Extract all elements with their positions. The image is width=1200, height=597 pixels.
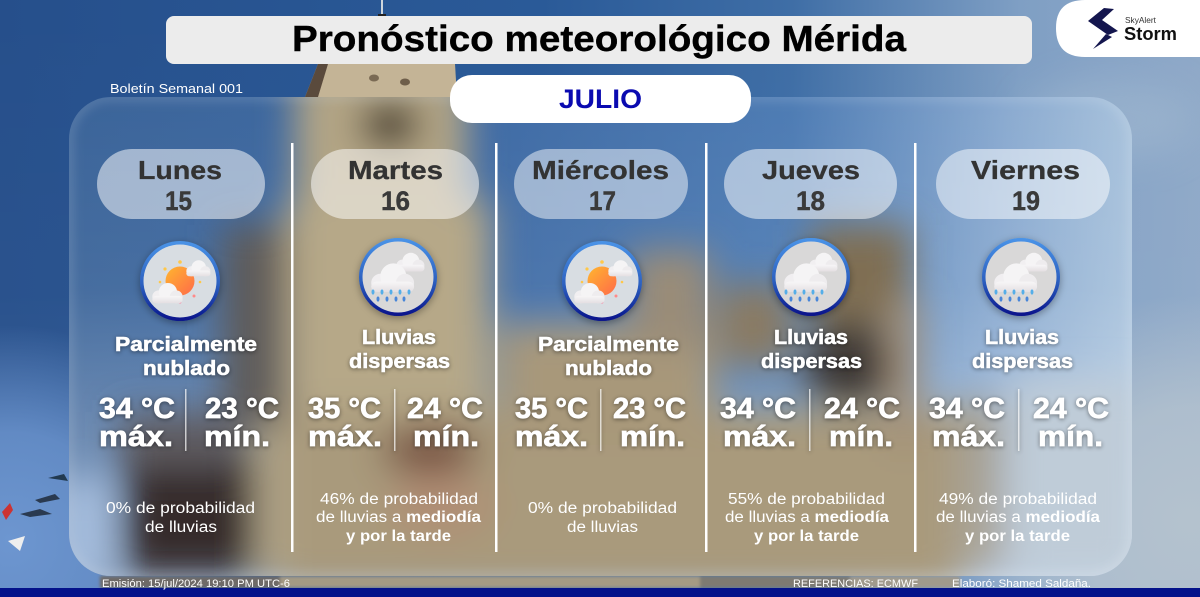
bulletin label: Boletín Semanal 001 — [110, 82, 243, 96]
temperatures: 35 °C — [308, 393, 381, 425]
rain probability: de lluvias — [567, 519, 638, 536]
column: Miércoles 17 — [514, 149, 688, 536]
day pill: Martes — [311, 149, 479, 219]
rain probability: de lluvias a mediodía — [936, 509, 1100, 526]
month pill — [450, 75, 751, 123]
condition text — [761, 327, 862, 373]
temperatures: 34 °C — [720, 393, 796, 425]
temperatures: máx. — [99, 421, 173, 453]
temperatures: 24 °C — [407, 393, 483, 425]
icon: partly cloudy — [140, 241, 220, 321]
footer: emission date: Emisión: 15/jul/2024 19:10 PM UTC-6 — [102, 578, 290, 590]
temperatures: mín. — [620, 421, 685, 453]
temperatures: 24 °C — [824, 393, 900, 425]
rain probability — [106, 500, 255, 536]
day pill: Lunes — [97, 149, 265, 219]
rain probability: de lluvias a mediodía — [316, 509, 481, 526]
condition text — [972, 327, 1073, 373]
icon: scattered rain — [772, 238, 850, 316]
temperatures: 23 °C — [613, 393, 686, 425]
temperatures — [99, 389, 279, 453]
temperatures — [308, 389, 483, 453]
logo: SkyAlert Storm — [1056, 0, 1200, 57]
temperatures — [515, 389, 686, 453]
condition text: Lluvias — [362, 327, 436, 349]
column: Martes 16 — [308, 149, 483, 545]
temperatures — [929, 389, 1109, 453]
footer: references: REFERENCIAS: ECMWF — [793, 578, 918, 590]
temperatures: mín. — [413, 421, 479, 453]
icon: scattered rain — [359, 238, 437, 316]
condition text: Parcialmente — [538, 334, 679, 356]
panel: frosted glass forecast panel — [60, 70, 1140, 590]
day pill: Viernes: Viernes — [971, 155, 1080, 185]
temperatures: 34 °C — [99, 393, 175, 425]
rain probability — [725, 491, 889, 545]
rain probability — [936, 491, 1100, 545]
condition text: Lluvias — [985, 327, 1059, 349]
rain probability — [528, 500, 677, 536]
temperatures: mín. — [1038, 421, 1103, 453]
day pill: Viernes — [936, 149, 1110, 219]
condition text: Parcialmente — [115, 334, 257, 356]
title bar — [166, 16, 1032, 64]
condition text: nublado — [565, 358, 652, 380]
temperatures: 35 °C — [515, 393, 588, 425]
condition text: nublado — [143, 358, 230, 380]
condition text: dispersas — [349, 351, 450, 373]
day pill: Jueves: Jueves — [762, 155, 860, 185]
temperatures — [720, 389, 900, 453]
rain probability — [316, 491, 481, 545]
rain probability: 55% de probabilidad — [728, 491, 885, 508]
bottom bar — [0, 588, 1200, 597]
day pill: Miércoles — [514, 149, 688, 219]
footer: author: Elaboró: Shamed Saldaña. — [952, 578, 1091, 590]
column dividers — [291, 143, 916, 552]
rain probability: 49% de probabilidad — [939, 491, 1097, 508]
day pill: Miércoles: 17 — [589, 186, 616, 216]
condition text — [538, 334, 679, 380]
day pill: Lunes: 15 — [165, 186, 192, 216]
condition text: dispersas — [761, 351, 862, 373]
temperatures: máx. — [723, 421, 796, 453]
column: Viernes 19 — [929, 149, 1110, 545]
temperatures: máx. — [515, 421, 588, 453]
day pill: Jueves: 18 — [796, 186, 825, 216]
rain probability: y por la tarde — [346, 528, 451, 545]
temperatures: máx. — [932, 421, 1005, 453]
temperatures: máx. — [308, 421, 382, 453]
temperatures: 24 °C — [1033, 393, 1109, 425]
condition text — [115, 334, 257, 380]
icon: partly cloudy — [562, 241, 642, 321]
temperatures: 34 °C — [929, 393, 1005, 425]
column: Jueves 18 — [720, 149, 900, 545]
rain probability: 46% de probabilidad — [320, 491, 478, 508]
icon: lightning bolt — [1088, 8, 1118, 49]
day pill: Jueves — [724, 149, 897, 219]
logo: SkyAlert Storm: Storm — [1124, 24, 1177, 44]
condition text — [349, 327, 450, 373]
icon: scattered rain — [982, 238, 1060, 316]
temperatures: mín. — [204, 421, 270, 453]
rain probability: y por la tarde — [965, 528, 1070, 545]
day pill: Viernes: 19 — [1012, 186, 1040, 216]
rain probability: de lluvias — [145, 519, 217, 536]
condition text: dispersas — [972, 351, 1073, 373]
title bar: Pronóstico meteorológico Mérida — [292, 18, 907, 59]
temperatures: mín. — [829, 421, 893, 453]
temperatures: 23 °C — [205, 393, 279, 425]
month pill: JULIO — [559, 84, 642, 114]
condition text: Lluvias — [774, 327, 848, 349]
day pill: Lunes: Lunes — [138, 155, 222, 185]
rain probability: y por la tarde — [754, 528, 859, 545]
rain probability: de lluvias a mediodía — [725, 509, 889, 526]
rain probability: 0% de probabilidad — [528, 500, 677, 517]
column: Lunes 15 — [97, 149, 279, 536]
day pill: Martes: Martes — [348, 155, 443, 185]
day pill: Martes: 16 — [381, 186, 410, 216]
logo: SkyAlert Storm: SkyAlert — [1125, 16, 1157, 25]
day pill: Miércoles: Miércoles — [532, 155, 669, 185]
rain probability: 0% de probabilidad — [106, 500, 255, 517]
